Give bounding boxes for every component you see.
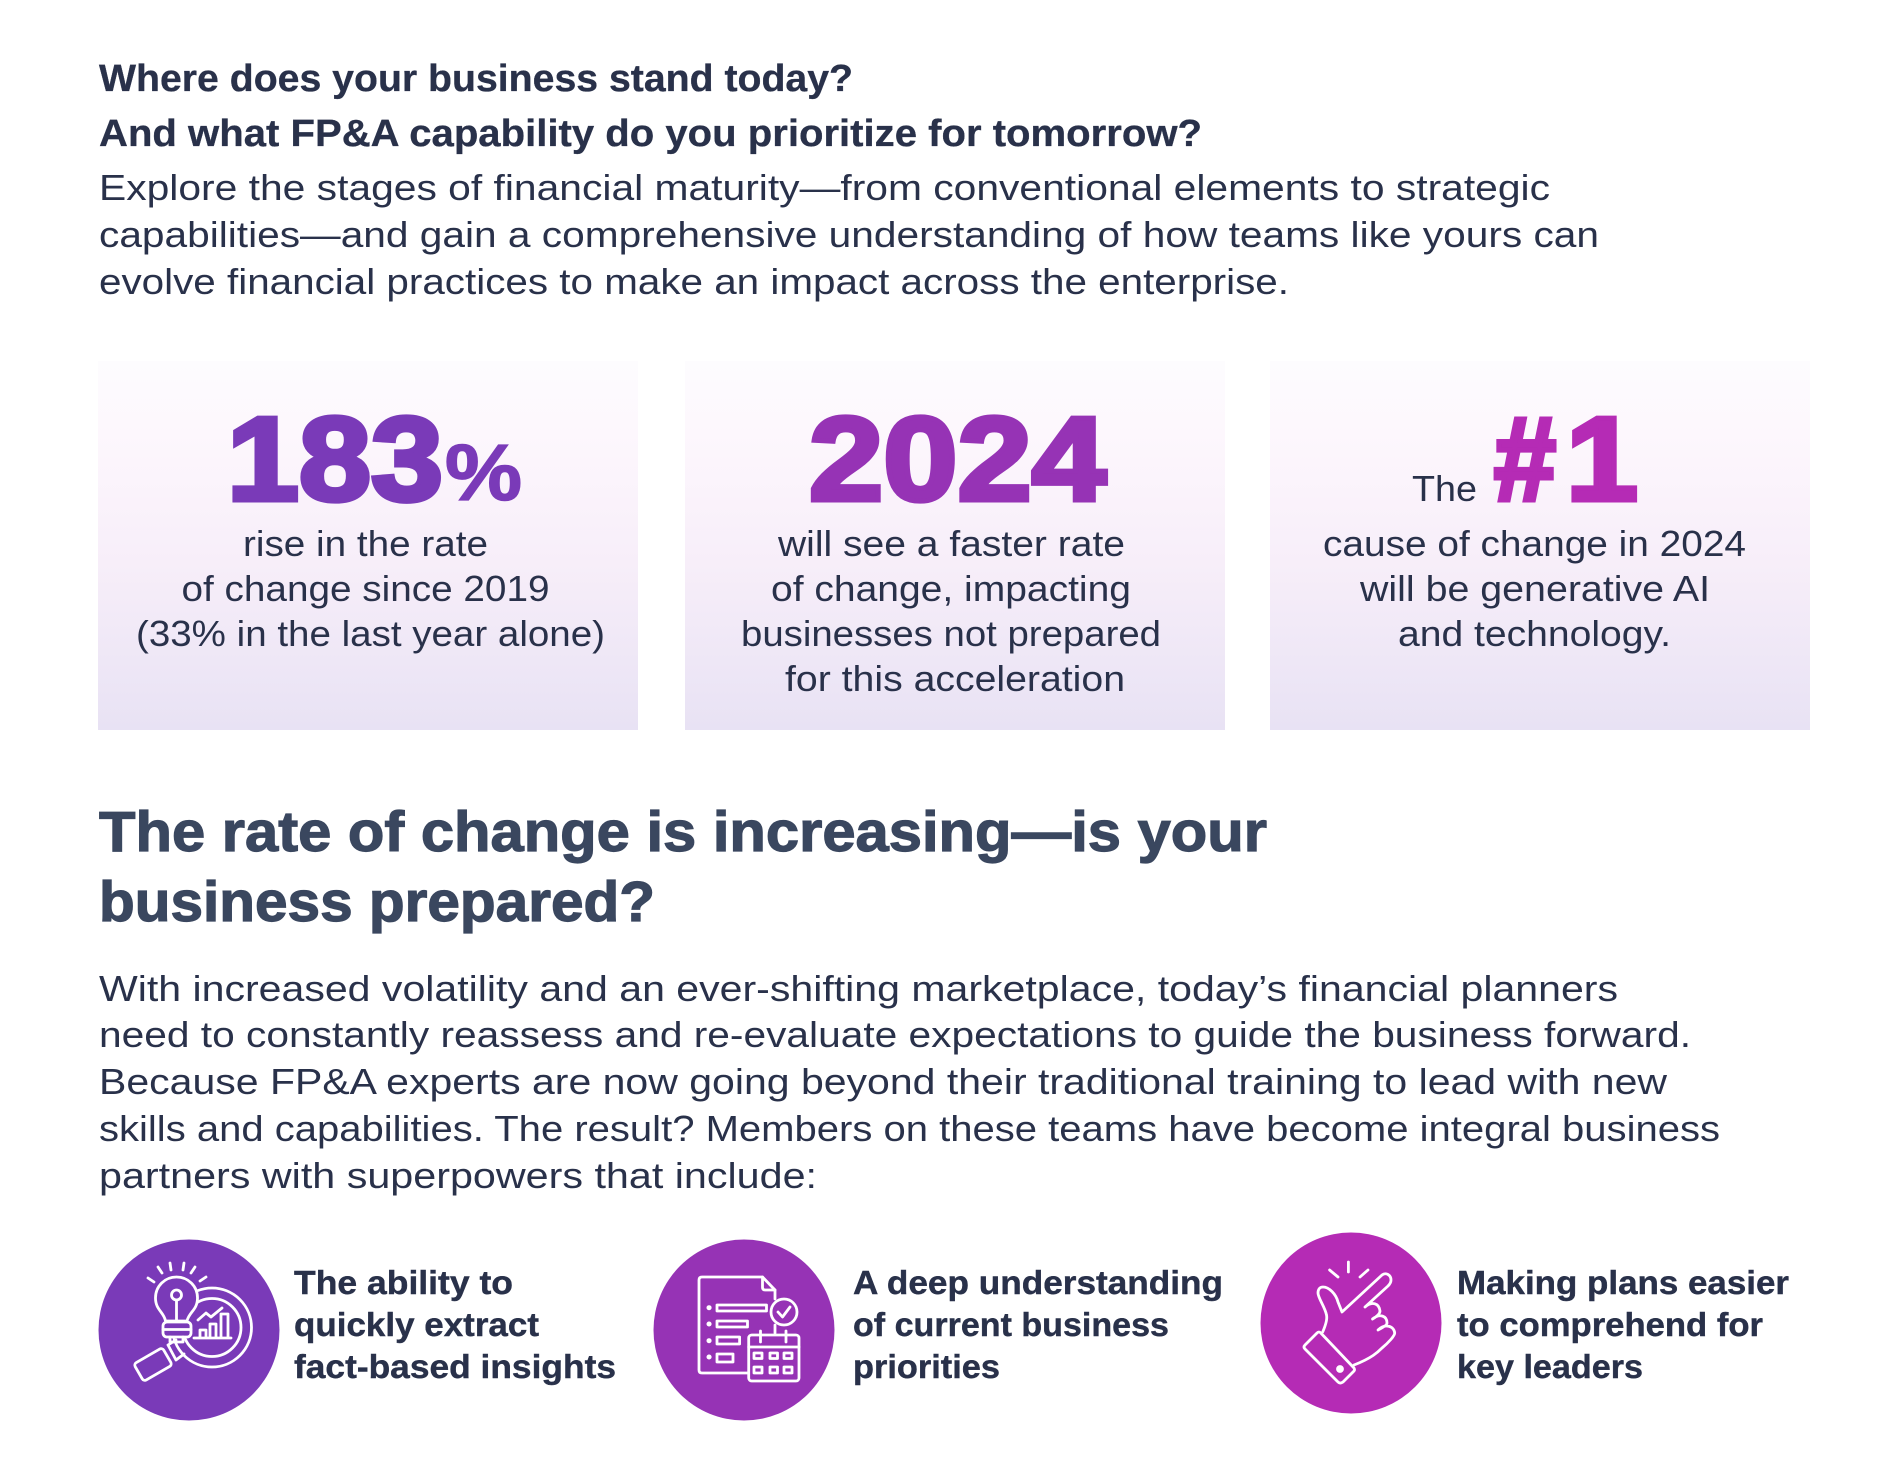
label: to comprehend for <box>1457 1306 1763 1343</box>
stat number: 2024: 2024 <box>809 393 1106 526</box>
section paragraph: With increased volatility and an ever-shifting marketplace, today’s financial planners <box>99 968 1618 1009</box>
label <box>853 1264 1223 1385</box>
stat caption: cause of change in 2024 <box>1323 523 1746 564</box>
intro heading <box>99 58 1202 155</box>
stat number: The #1: 1 <box>1566 393 1638 526</box>
label: A deep understanding <box>853 1264 1223 1301</box>
stat number: The #1: # <box>1494 393 1556 526</box>
section paragraph: need to constantly reassess and re-evaluate expectations to guide the business forward. <box>99 1014 1691 1055</box>
section paragraph: partners with superpowers that include: <box>99 1155 817 1196</box>
label: fact-based insights <box>294 1348 616 1385</box>
icon: lightbulb and magnifier <box>98 1240 280 1420</box>
stat caption: will be generative AI <box>1359 568 1710 609</box>
stat caption: of change, impacting <box>771 568 1131 609</box>
label: key leaders <box>1457 1348 1643 1385</box>
label: Making plans easier <box>1457 1264 1789 1301</box>
section paragraph: skills and capabilities. The result? Members on these teams have become integral business <box>99 1108 1720 1149</box>
icon: snapping fingers hand <box>1260 1232 1442 1414</box>
stat caption <box>136 523 605 654</box>
panel: 183% stat <box>98 361 638 730</box>
intro paragraph: Explore the stages of financial maturity—from conventional elements to strategic <box>99 167 1550 208</box>
intro paragraph: evolve financial practices to make an impact across the enterprise. <box>99 261 1289 302</box>
stat number: The #1: The <box>1412 468 1477 509</box>
section paragraph: Because FP&A experts are now going beyond their traditional training to lead with new <box>99 1061 1668 1102</box>
intro paragraph <box>99 167 1599 302</box>
label: priorities <box>853 1348 1000 1385</box>
superpower: comprehension <box>1260 1232 1789 1414</box>
stat caption: rise in the rate <box>243 523 488 564</box>
stat number: 183% <box>227 393 522 526</box>
intro paragraph: capabilities—and gain a comprehensive understanding of how teams like yours can <box>99 214 1599 255</box>
label <box>294 1264 616 1385</box>
stat caption: for this acceleration <box>785 658 1125 699</box>
intro heading: And what FP&A capability do you prioritize for tomorrow? <box>99 113 1202 155</box>
stat number: 183%: % <box>445 428 522 517</box>
superpower: priorities <box>654 1240 1223 1420</box>
intro heading: Where does your business stand today? <box>99 58 853 100</box>
section heading: business prepared? <box>99 870 655 934</box>
superpower: insights <box>98 1240 616 1420</box>
stat caption: (33% in the last year alone) <box>136 613 605 654</box>
label: of current business <box>853 1306 1169 1343</box>
stat number: 183%: 183 <box>227 393 443 526</box>
stat caption <box>1323 523 1746 654</box>
panel: 2024 stat <box>685 361 1225 730</box>
label: quickly extract <box>294 1306 539 1343</box>
label <box>1457 1264 1789 1385</box>
label: The ability to <box>294 1264 513 1301</box>
section paragraph <box>99 968 1720 1196</box>
section heading: The rate of change is increasing—is your <box>99 800 1267 864</box>
stat number: The #1 <box>1412 393 1638 526</box>
stat caption: will see a faster rate <box>777 523 1125 564</box>
stat caption: businesses not prepared <box>741 613 1161 654</box>
icon: document and calendar <box>654 1240 834 1420</box>
stat caption: of change since 2019 <box>182 568 550 609</box>
section heading <box>99 800 1267 934</box>
stat caption <box>741 523 1161 699</box>
panel: #1 stat <box>1270 361 1810 730</box>
stat caption: and technology. <box>1398 613 1671 654</box>
